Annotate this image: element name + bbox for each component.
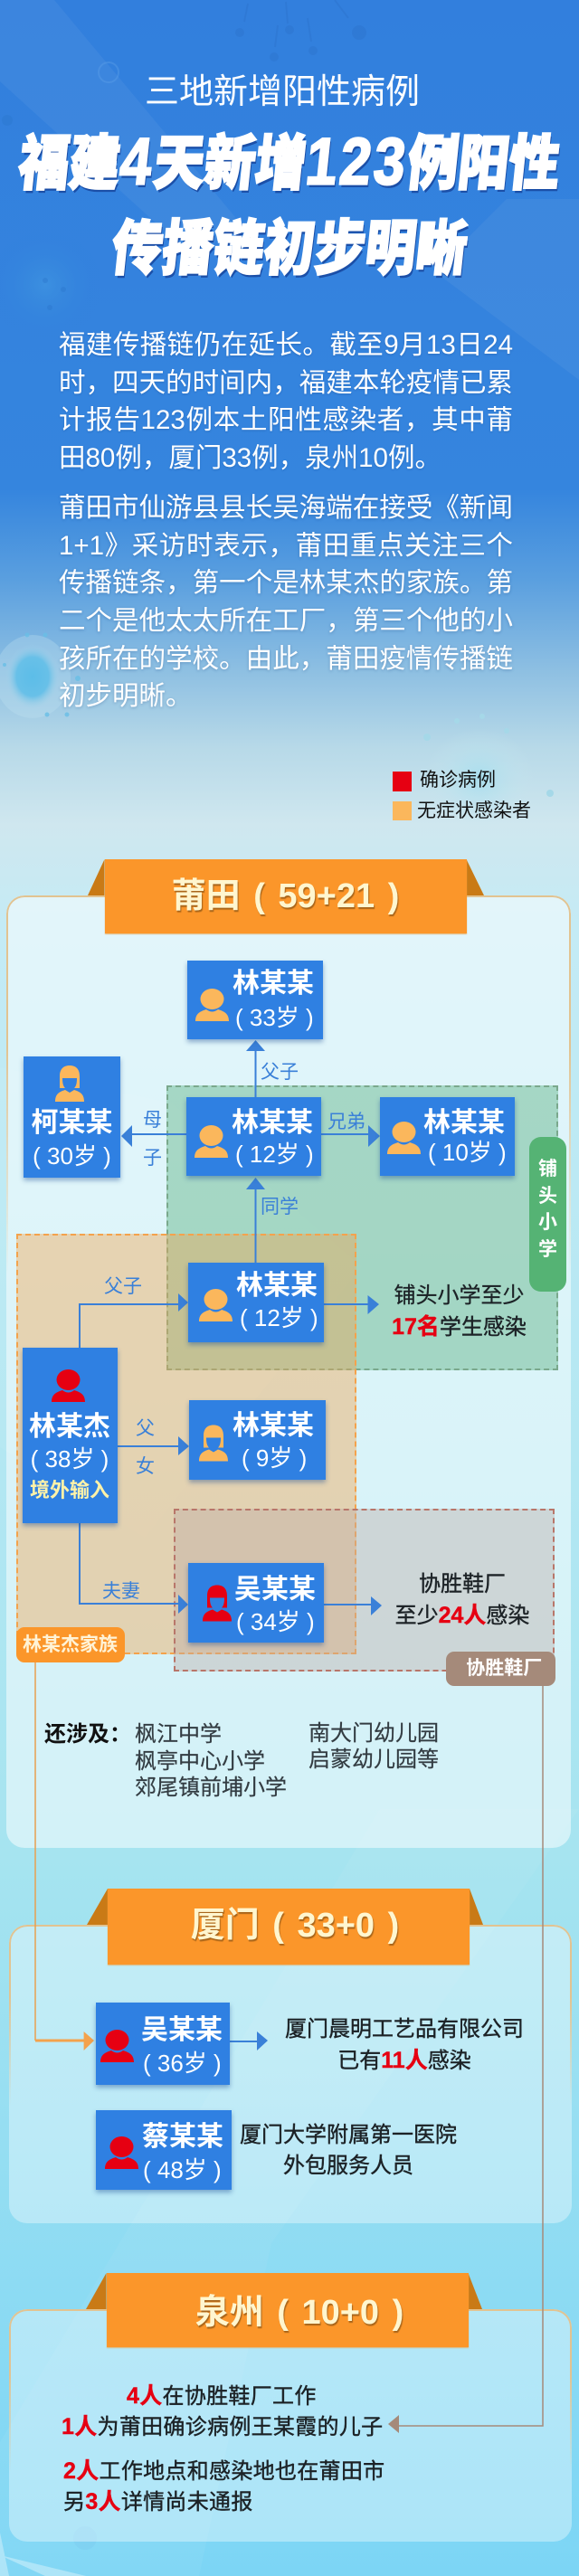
age: ( 12岁 ) <box>240 1304 318 1331</box>
relation: daughter: 女 <box>136 1456 155 1477</box>
relation labels <box>102 1062 365 1602</box>
callout: factory: 协胜鞋厂 <box>419 1572 506 1596</box>
name: 吴某某 <box>141 2015 223 2045</box>
icon: female asymptomatic <box>55 1065 84 1102</box>
callout: school: 铺头小学至少 <box>394 1283 525 1308</box>
text: Quanzhou details: 2人工作地点和感染地也在莆田市 <box>63 2458 384 2484</box>
tag: Putou primary school: 铺 <box>538 1159 557 1179</box>
text: Quanzhou details: 1人为莆田确诊病例王某霞的儿子 <box>62 2414 383 2439</box>
age: ( 12岁 ) <box>235 1141 314 1168</box>
name: 林某某 <box>233 1411 314 1441</box>
school list col 1 <box>135 1722 287 1800</box>
name: 林某某 <box>233 969 314 999</box>
virus decoration: top <box>235 0 366 62</box>
age: ( 34岁 ) <box>236 1608 315 1635</box>
panel: Quanzhou <box>9 2309 572 2542</box>
icon: male confirmed <box>105 2136 138 2169</box>
section header: Xiamen: 厦门 ( 33+0 ) <box>191 1907 399 1945</box>
icon: male asymptomatic <box>387 1122 421 1154</box>
intro paragraph 2: 孩所在的学校。由此，莆田疫情传播链 <box>59 644 513 674</box>
intro paragraph 2: 二个是他太太所在工厂，第三个他的小 <box>59 606 513 636</box>
school list col 2: 南大门幼儿园 <box>308 1721 439 1746</box>
main title line 1: 福建4天新增123例阳性 <box>15 126 564 199</box>
legend swatch: asymptomatic <box>393 801 412 820</box>
virus decoration: left light blue <box>0 633 81 718</box>
panel: Xiamen <box>9 1925 572 2223</box>
age: ( 9岁 ) <box>242 1444 307 1472</box>
icon: male asymptomatic <box>199 1289 233 1321</box>
legend <box>393 770 531 821</box>
text: Xiamen Chenming: 厦门晨明工艺品有限公司 <box>285 2017 524 2041</box>
text: Quanzhou details: 4人在协胜鞋厂工作 <box>127 2383 317 2409</box>
age: ( 30岁 ) <box>33 1142 111 1170</box>
callout: school <box>392 1283 527 1340</box>
relation: father: 父 <box>136 1418 155 1439</box>
school list col 1: 枫亭中心小学 <box>135 1749 265 1774</box>
text: Xiamen University hospital <box>240 2123 457 2178</box>
legend label: asymptomatic: 无症状感染者 <box>417 800 531 821</box>
zone: Xiesheng shoe factory <box>174 1509 555 1672</box>
school list col 1: 枫江中学 <box>135 1722 222 1747</box>
intro paragraph 2: 传播链条，第一个是林某杰的家族。第 <box>59 568 513 598</box>
text: Xiamen Chenming: 已有11人感染 <box>337 2048 471 2073</box>
card: Lin 10 <box>380 1097 515 1176</box>
also involved <box>44 1721 439 1800</box>
age: ( 33岁 ) <box>235 1004 314 1031</box>
text: Xiamen University hospital: 外包服务人员 <box>283 2154 413 2178</box>
name: 吴某某 <box>234 1575 316 1605</box>
card: Lin 12 centre <box>186 1097 321 1176</box>
tag: Lin family: 林某杰家族 <box>23 1634 118 1655</box>
tag: Xiesheng shoe factory: 协胜鞋厂 <box>466 1658 542 1679</box>
section header: Quanzhou: 泉州 ( 10+0 ) <box>195 2294 403 2332</box>
name: 林某杰 <box>29 1412 110 1442</box>
also involved heading: 还涉及： <box>44 1722 131 1747</box>
subtitle: 三地新增阳性病例 <box>145 73 420 111</box>
section header: Quanzhou <box>86 2273 482 2349</box>
school list col 2: 启蒙幼儿园等 <box>308 1747 439 1772</box>
decoration: bottom left light <box>0 2526 97 2576</box>
card: Wu 34 <box>188 1563 324 1643</box>
text: Xiamen University hospital: 厦门大学附属第一医院 <box>240 2123 457 2147</box>
section header: Xiamen <box>87 1889 483 1966</box>
card: Ke 30 <box>24 1056 120 1178</box>
callout: factory <box>395 1572 529 1628</box>
icon: male confirmed <box>100 2030 134 2062</box>
panel: Putian <box>6 895 571 1848</box>
main title line 2: 传播链初步明晰 <box>109 214 470 282</box>
virus decoration: right legend <box>423 714 554 828</box>
age: ( 38岁 ) <box>31 1445 109 1473</box>
card: Lin 33 <box>187 961 323 1039</box>
section header: Putian <box>88 859 484 935</box>
intro paragraph 1 <box>59 330 513 473</box>
school list col 1: 郊尾镇前埔小学 <box>135 1776 287 1800</box>
text: Quanzhou details: 另3人详情尚未通报 <box>63 2489 253 2514</box>
school list col 2 <box>308 1721 439 1772</box>
intro paragraph 1: 计报告123例本土阳性感染者，其中莆 <box>59 405 513 435</box>
name: 林某某 <box>232 1108 313 1138</box>
icon: female confirmed <box>203 1585 232 1621</box>
tag: Putou primary school: 头 <box>538 1185 557 1207</box>
legend swatch: confirmed <box>393 772 412 791</box>
name: 林某某 <box>423 1108 505 1138</box>
name: 林某某 <box>236 1271 318 1301</box>
card: Cai 48 <box>96 2110 232 2190</box>
intro paragraph 2: 1+1》采访时表示，莆田重点关注三个 <box>59 531 513 561</box>
card: Lin 12 lower <box>188 1263 324 1342</box>
relation: son: 子 <box>143 1148 162 1169</box>
relation: father-son lower: 父子 <box>104 1276 142 1297</box>
zone: Putou primary school <box>166 1085 558 1370</box>
intro paragraph 1: 田80例，厦门33例，泉州10例。 <box>59 443 441 473</box>
relation: couple: 夫妻 <box>102 1581 140 1602</box>
text: Quanzhou details <box>62 2383 384 2514</box>
relation: mother: 母 <box>143 1110 162 1131</box>
relation: classmates: 同学 <box>261 1197 299 1217</box>
icon: male confirmed <box>52 1369 85 1402</box>
card: Wu 36 <box>96 2003 230 2085</box>
icon: male asymptomatic <box>195 1125 228 1158</box>
zone: Lin family <box>16 1234 356 1654</box>
age: ( 48岁 ) <box>143 2156 222 2183</box>
name: 蔡某某 <box>142 2122 223 2152</box>
intro paragraph 2 <box>59 493 513 711</box>
text: Xiamen Chenming <box>285 2017 524 2073</box>
tag: Putou primary school <box>529 1137 566 1292</box>
intro paragraph 1: 时，四天的时间内，福建本轮疫情已累 <box>59 368 513 398</box>
tag: Putou primary school: 小 <box>538 1212 557 1233</box>
card: Lin 9 <box>189 1400 326 1480</box>
legend label: confirmed: 确诊病例 <box>420 770 496 791</box>
intro paragraph 1: 福建传播链仍在延长。截至9月13日24 <box>59 330 513 360</box>
card: Lin Jie 38 <box>22 1348 118 1523</box>
icon: male asymptomatic <box>195 989 229 1021</box>
callout: factory: 至少24人感染 <box>395 1603 529 1628</box>
intro paragraph 2: 初步明晰。 <box>59 681 193 711</box>
name: 柯某某 <box>31 1108 112 1138</box>
age: ( 36岁 ) <box>143 2050 222 2077</box>
virus decoration: left dark <box>0 62 119 341</box>
relation: brothers: 兄弟 <box>327 1112 365 1132</box>
tag: Xiesheng shoe factory <box>446 1652 555 1686</box>
intro paragraph 2: 莆田市仙游县县长吴海端在接受《新闻 <box>59 493 513 523</box>
note: imported: 境外输入 <box>30 1479 109 1501</box>
tag: Lin family <box>16 1627 125 1662</box>
icon: female asymptomatic <box>199 1425 228 1462</box>
section header: Putian: 莆田 ( 59+21 ) <box>172 877 399 915</box>
tag: Putou primary school: 学 <box>538 1239 557 1259</box>
age: ( 10岁 ) <box>428 1139 507 1166</box>
relation: father-son top: 父子 <box>261 1062 299 1083</box>
callout: school: 17名学生感染 <box>392 1314 527 1340</box>
